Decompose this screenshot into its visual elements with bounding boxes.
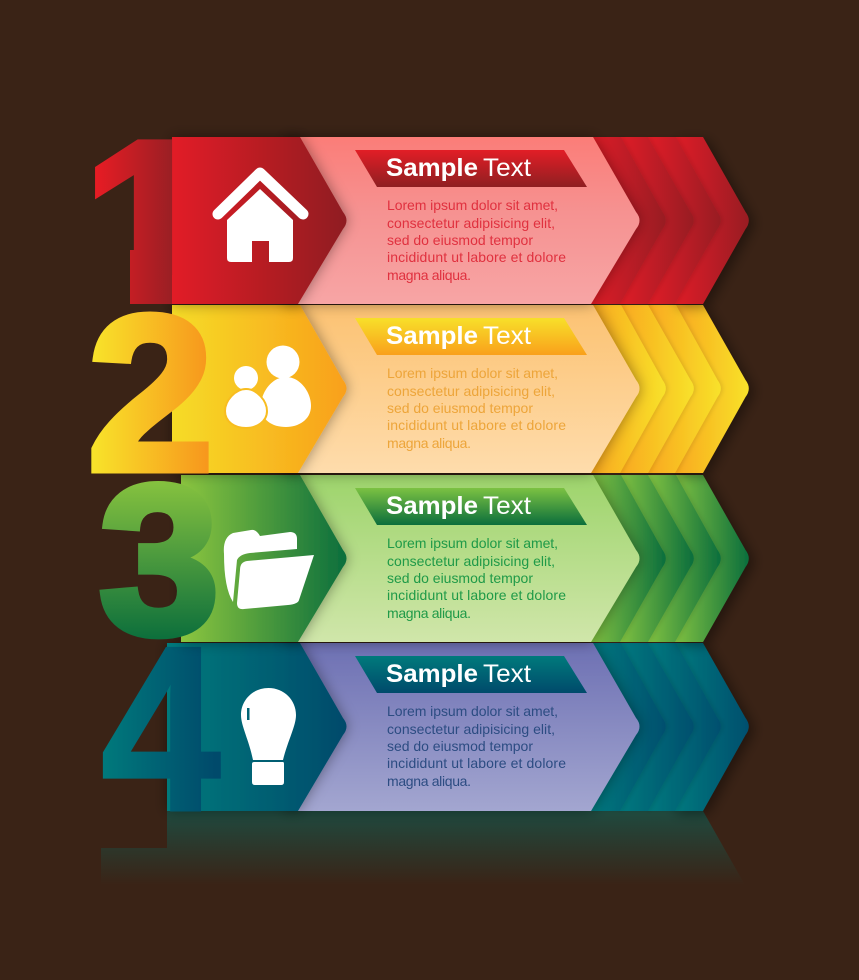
numeral 1 [95, 139, 172, 304]
row 2 [87, 269, 749, 517]
body text: incididunt ut labore et dolore [387, 249, 566, 265]
body text: magna aliqua. [387, 773, 471, 789]
body text: sed do eiusmod tempor [387, 570, 533, 586]
label tab [172, 305, 346, 473]
body text: Lorem ipsum dolor sit amet, [387, 197, 558, 213]
label tab [181, 475, 346, 642]
body text: consectetur adipisicing elit, [387, 721, 555, 737]
body text: sed do eiusmod tempor [387, 400, 533, 416]
chevrons [590, 137, 749, 304]
ribbon: Sample [386, 492, 478, 520]
label tab [167, 643, 346, 811]
body text: magna aliqua. [387, 267, 471, 283]
text panel [285, 137, 640, 304]
body text [387, 703, 566, 789]
body text: magna aliqua. [387, 605, 471, 621]
chevrons [590, 305, 749, 473]
row 1 [95, 132, 754, 315]
body text: incididunt ut labore et dolore [387, 755, 566, 771]
body text [387, 535, 566, 621]
icon: people [225, 346, 311, 428]
row 4 [101, 597, 749, 860]
row 3 [99, 442, 749, 679]
body text [387, 197, 566, 283]
icon: house [218, 173, 303, 262]
chevrons [590, 643, 749, 811]
numeral 3: 3 [99, 442, 219, 679]
ribbon: Sample [386, 660, 478, 688]
icon: folder [224, 530, 314, 609]
text panel [285, 475, 640, 642]
ribbon [355, 488, 587, 525]
text panel [285, 643, 640, 811]
body text: Lorem ipsum dolor sit amet, [387, 535, 558, 551]
label tab [172, 137, 346, 304]
ribbon: Text [483, 492, 531, 520]
numeral 1: 1 [82, 91, 213, 354]
reflection [101, 811, 745, 885]
body text: magna aliqua. [387, 435, 471, 451]
body text: sed do eiusmod tempor [387, 738, 533, 754]
numeral 2: 2 [87, 269, 214, 517]
text panel [285, 305, 640, 473]
body text: consectetur adipisicing elit, [387, 553, 555, 569]
body text: Lorem ipsum dolor sit amet, [387, 703, 558, 719]
chevrons [590, 475, 749, 642]
body text: consectetur adipisicing elit, [387, 215, 555, 231]
icon: light bulb [241, 688, 296, 785]
body text: incididunt ut labore et dolore [387, 417, 566, 433]
body text: sed do eiusmod tempor [387, 232, 533, 248]
ribbon [355, 150, 587, 187]
numeral 4: 4 [101, 597, 221, 860]
ribbon: Sample [386, 154, 478, 182]
ribbon: Sample [386, 322, 478, 350]
infographic [91, 132, 754, 870]
ribbon [355, 318, 587, 355]
body text: Lorem ipsum dolor sit amet, [387, 365, 558, 381]
ribbon: Text [483, 154, 531, 182]
body text: consectetur adipisicing elit, [387, 383, 555, 399]
body text: incididunt ut labore et dolore [387, 587, 566, 603]
body text [387, 365, 566, 451]
ribbon: Text [483, 322, 531, 350]
ribbon [355, 656, 587, 693]
ribbon: Text [483, 660, 531, 688]
